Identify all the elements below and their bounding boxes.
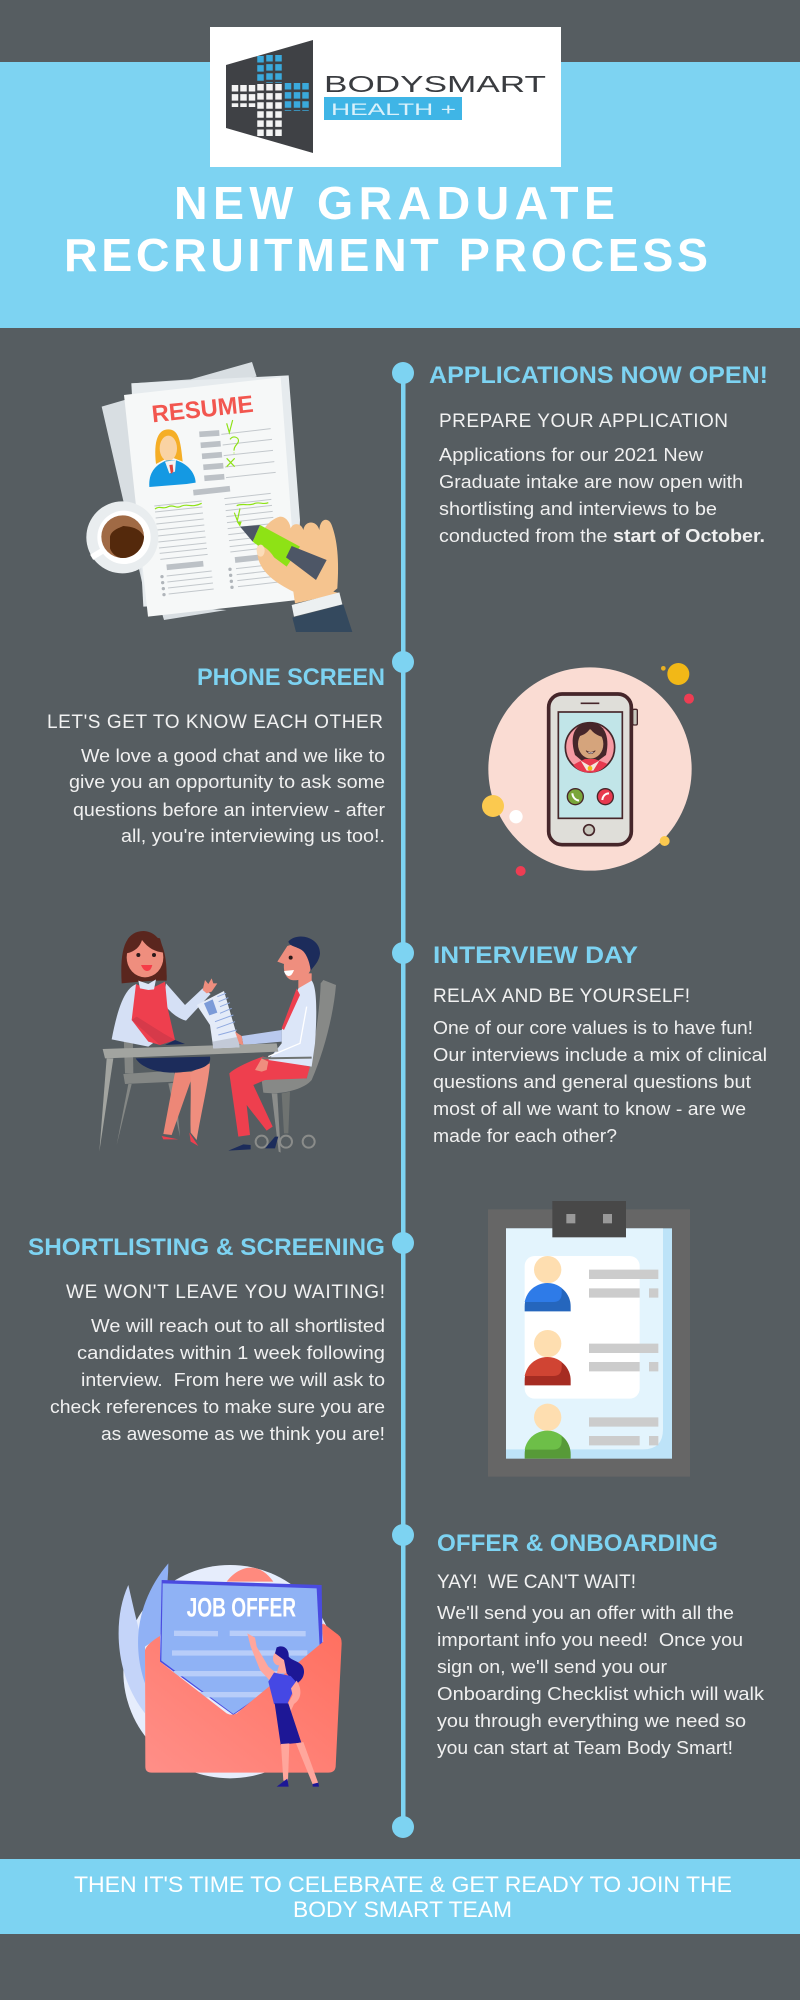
body text: most of all we want to know - are we — [433, 1099, 746, 1119]
offer letter — [160, 1580, 323, 1715]
woman — [112, 931, 217, 1146]
body text: made for each other? — [433, 1126, 617, 1146]
body text: One of our core values is to have fun! — [433, 1018, 753, 1038]
panel: shortlisting and screening — [28, 1234, 385, 1444]
envelope — [145, 1623, 342, 1773]
icon: smartphone incoming call — [482, 663, 694, 876]
heading: OFFER & ONBOARDING — [437, 1530, 718, 1557]
body text — [433, 1018, 767, 1146]
body text: shortlisting and interviews to be — [439, 499, 717, 519]
icon: two people in an interview — [99, 931, 336, 1153]
document — [197, 991, 239, 1048]
timeline — [392, 362, 414, 1838]
body text: We will reach out to all shortlisted — [91, 1316, 385, 1336]
closing banner — [0, 1859, 800, 1934]
heading: INTERVIEW DAY — [433, 942, 638, 969]
subheading: RELAX AND BE YOURSELF! — [433, 986, 690, 1007]
title: NEW GRADUATE — [174, 177, 615, 229]
body text: all, you're interviewing us too!. — [121, 826, 385, 846]
candidate 1 — [525, 1256, 658, 1311]
body text: as awesome as we think you are! — [101, 1424, 385, 1444]
body text: candidates within 1 week following — [77, 1343, 385, 1363]
icon: candidate clipboard — [488, 1201, 690, 1477]
subheading: LET'S GET TO KNOW EACH OTHER — [47, 712, 383, 733]
skirt — [136, 1057, 210, 1073]
body text: questions before an interview - after — [73, 800, 385, 820]
subheading: WE WON'T LEAVE YOU WAITING! — [66, 1282, 385, 1303]
body text: interview. From here we will ask to — [81, 1370, 385, 1390]
candidate 2 — [525, 1330, 658, 1385]
icon: resume with hand and coffee: RESUME — [150, 391, 255, 428]
logo: Body Smart Health + — [210, 27, 561, 167]
body text: We'll send you an offer with all the — [437, 1603, 734, 1623]
body text: sign on, we'll send you our — [437, 1657, 667, 1677]
icon: resume with hand and coffee — [86, 362, 352, 632]
body text — [437, 1603, 765, 1758]
body text: We love a good chat and we like to — [81, 746, 385, 766]
body text — [439, 445, 765, 546]
heading: APPLICATIONS NOW OPEN! — [429, 362, 768, 389]
body text: Applications for our 2021 New — [439, 445, 704, 465]
heading: SHORTLISTING & SCREENING — [28, 1234, 385, 1261]
body text: you can start at Team Body Smart! — [437, 1738, 733, 1758]
closing banner: BODY SMART TEAM — [293, 1897, 512, 1922]
panel: interview day — [433, 942, 767, 1146]
panel: applications now open — [429, 362, 768, 546]
body text — [50, 1316, 385, 1444]
logo: Body Smart Health +: HEALTH + — [331, 100, 456, 119]
man — [228, 937, 320, 1151]
heading: PHONE SCREEN — [197, 664, 385, 691]
body text: give you an opportunity to ask some — [69, 772, 385, 792]
table — [103, 1043, 278, 1058]
subheading: YAY! WE CAN'T WAIT! — [437, 1572, 636, 1593]
body text: check references to make sure you are — [50, 1397, 385, 1417]
woman pointing — [247, 1633, 319, 1787]
closing banner: THEN IT'S TIME TO CELEBRATE & GET READY TO JOIN THE — [74, 1872, 732, 1897]
subheading: PREPARE YOUR APPLICATION — [439, 411, 728, 432]
icon: job offer envelope — [119, 1563, 342, 1787]
panel: offer and onboarding — [437, 1530, 765, 1758]
body text — [69, 746, 385, 846]
body text: Our interviews include a mix of clinical — [433, 1045, 767, 1065]
body text: questions and general questions but — [433, 1072, 751, 1092]
logo: Body Smart Health +: BODYSMART — [324, 71, 546, 97]
woman's chair — [117, 1027, 180, 1145]
title: RECRUITMENT PROCESS — [64, 229, 708, 281]
body text: Graduate intake are now open with — [439, 472, 743, 492]
man's chair — [256, 980, 336, 1153]
header band — [0, 62, 800, 328]
body text: important info you need! Once you — [437, 1630, 743, 1650]
title — [64, 177, 708, 281]
body text: you through everything we need so — [437, 1711, 746, 1731]
candidate 3 — [525, 1404, 658, 1459]
offer letter: JOB OFFER — [187, 1593, 296, 1623]
panel: phone screen — [47, 664, 385, 846]
body text: Onboarding Checklist which will walk — [437, 1684, 765, 1704]
body text: conducted from the start of October. — [439, 526, 765, 546]
